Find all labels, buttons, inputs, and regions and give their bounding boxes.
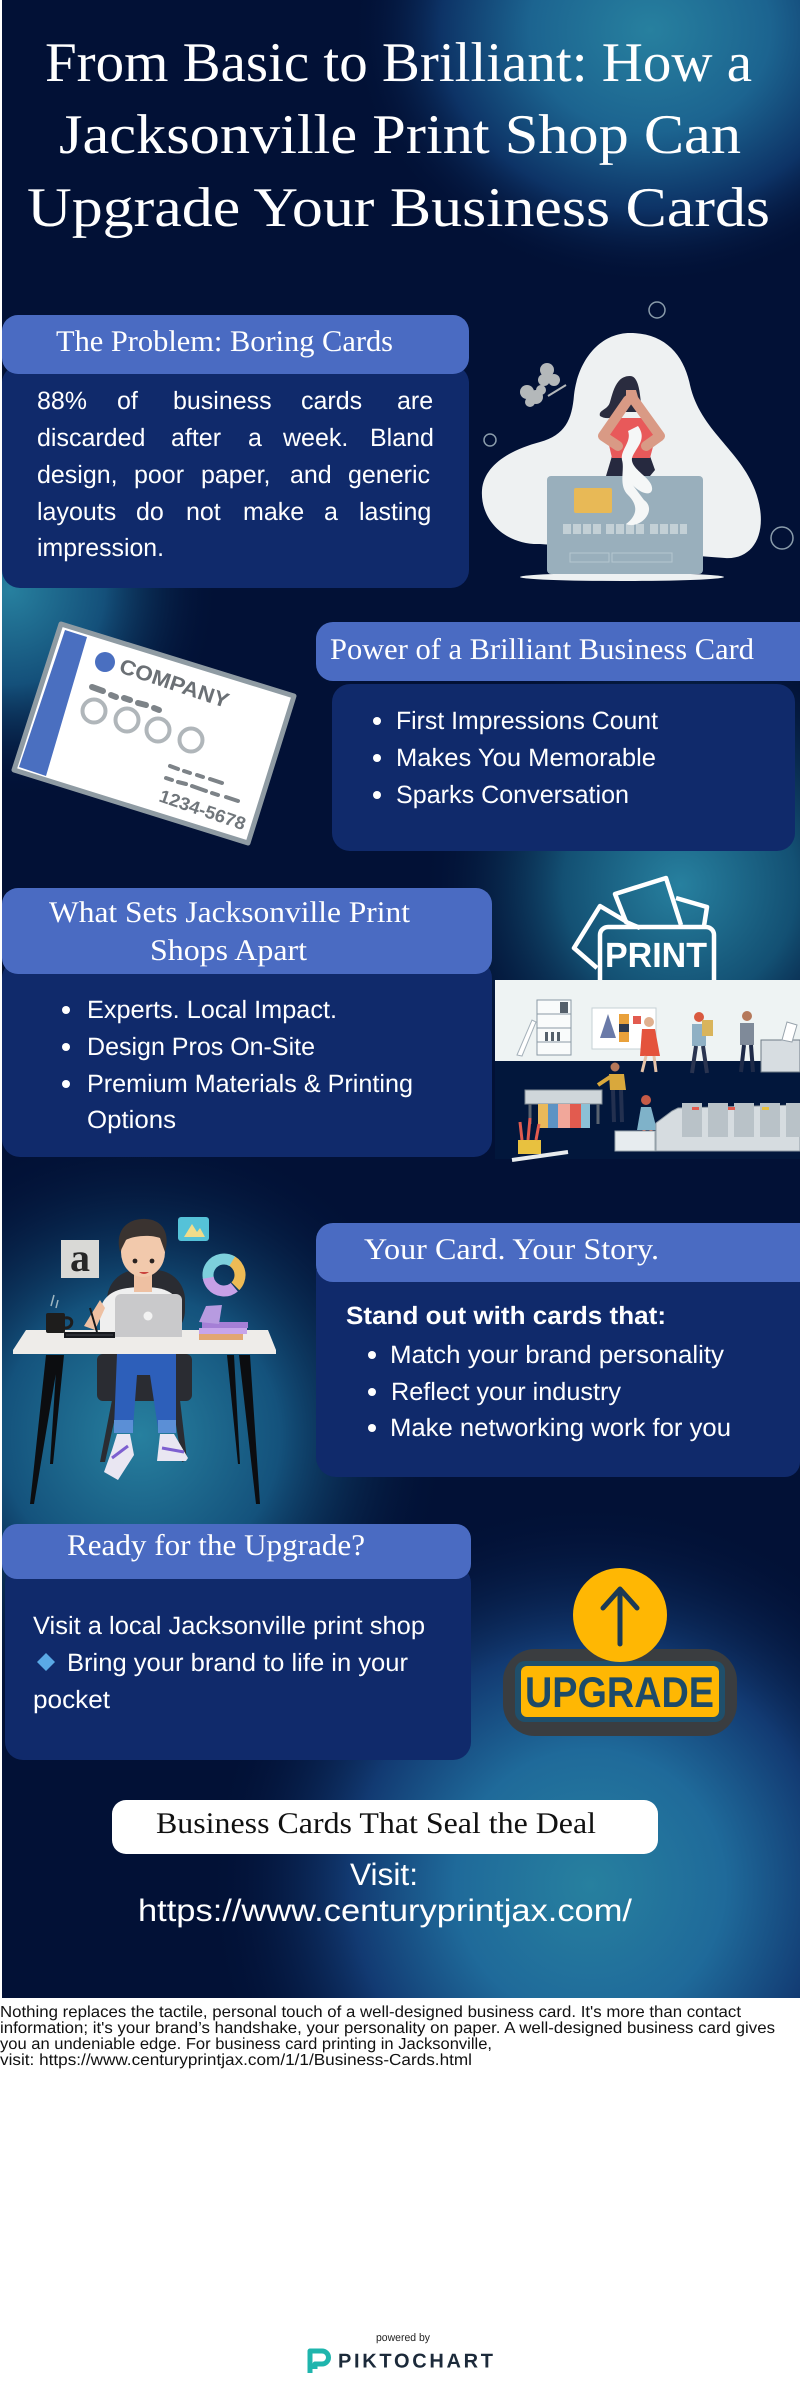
power heading <box>316 622 800 681</box>
apart heading: What Sets Jacksonville Print <box>49 896 411 929</box>
decorative circles <box>484 302 793 549</box>
piktochart logo <box>310 2351 328 2373</box>
upgrade text: Visit a local Jacksonville print shop <box>33 1612 425 1640</box>
wide printer <box>525 1090 602 1128</box>
desk <box>13 1330 276 1504</box>
color ring <box>201 1252 247 1298</box>
problem heading: The Problem: Boring Cards <box>56 325 393 358</box>
apart bullets: Premium Materials & Printing <box>87 1070 413 1098</box>
story body <box>316 1270 800 1477</box>
problem body <box>2 365 469 588</box>
credit card <box>547 476 703 574</box>
apart bullets: Options <box>87 1106 176 1134</box>
apart body <box>2 960 492 1157</box>
power bullets: Sparks Conversation <box>396 781 629 809</box>
rings <box>82 700 202 752</box>
powered by piktochart: powered by <box>376 2332 430 2344</box>
problem text: make <box>243 498 304 526</box>
panel: your card your story <box>316 1223 800 1477</box>
shop wall <box>495 980 800 1061</box>
person at copier <box>740 1011 800 1072</box>
upgrade text: Bring your brand to life in your <box>67 1649 408 1677</box>
description paragraph: Nothing replaces the tactile, personal touch of a well-designed business card. It's more than contact <box>0 2004 742 2021</box>
person with box <box>692 1012 713 1073</box>
problem text: of <box>117 387 138 415</box>
powered by piktochart <box>310 2332 493 2373</box>
illustration: designer at desk <box>13 1217 276 1504</box>
problem text: a <box>324 498 338 526</box>
title <box>27 32 770 239</box>
problem text: are <box>397 387 433 415</box>
apart heading <box>2 888 492 974</box>
story bullets <box>368 1341 731 1442</box>
power body <box>332 684 795 851</box>
callout: seal the deal: Business Cards That Seal the Deal <box>156 1807 596 1840</box>
problem text: lasting <box>359 498 431 526</box>
address dashes <box>166 766 238 801</box>
upgrade text <box>33 1612 425 1714</box>
panel: ready for the upgrade <box>2 1524 471 1760</box>
visit link: Visit: <box>350 1857 418 1892</box>
story heading: Your Card. Your Story. <box>364 1233 659 1266</box>
panel: the problem <box>2 315 469 588</box>
problem text: a <box>248 424 262 452</box>
problem text: layouts <box>37 498 116 526</box>
description paragraph: you an undeniable edge. For business card printing in Jacksonville, <box>0 2036 492 2053</box>
panel: power of a brilliant card <box>316 622 800 851</box>
problem text: Bland <box>370 424 434 452</box>
icon: print cards <box>574 878 714 980</box>
person in red <box>640 1017 660 1072</box>
illustration: woman with credit card <box>482 302 793 581</box>
problem heading <box>2 315 469 374</box>
badge pill <box>503 1649 737 1736</box>
power heading: Power of a Brilliant Business Card <box>330 633 754 666</box>
chair <box>97 1270 192 1462</box>
story bullets: Make networking work for you <box>390 1414 731 1442</box>
power bullets <box>373 707 658 809</box>
visit link <box>138 1857 632 1928</box>
problem text <box>37 387 434 562</box>
designer body <box>84 1272 188 1480</box>
problem text: not <box>186 498 221 526</box>
problem text: do <box>136 498 164 526</box>
illustration: print shop <box>495 980 800 1160</box>
apart bullets <box>62 996 413 1134</box>
badge label: UPGRADE <box>525 1669 714 1717</box>
paper bin <box>512 1118 568 1160</box>
letter tile <box>61 1235 99 1280</box>
upgrade body <box>5 1565 471 1760</box>
receipt <box>622 426 652 525</box>
problem text: cards <box>301 387 362 415</box>
problem text: discarded <box>37 424 145 452</box>
icon: upgrade badge <box>503 1568 737 1736</box>
title: From Basic to Brilliant: How a <box>45 32 752 94</box>
person in yellow <box>598 1062 626 1122</box>
problem text: generic <box>348 461 430 489</box>
illustration: company business card <box>14 624 294 843</box>
description paragraph: visit: https://www.centuryprintjax.com/1/1/Business-Cards.html <box>0 2052 472 2069</box>
problem text: after <box>171 424 221 452</box>
visit link: https://www.centuryprintjax.com/ <box>138 1893 632 1928</box>
designer head <box>119 1219 167 1277</box>
card shadow <box>520 573 724 581</box>
apart heading: Shops Apart <box>150 934 308 967</box>
title: Upgrade Your Business Cards <box>27 177 770 239</box>
powered by piktochart: PIKTOCHART <box>338 2350 493 2372</box>
badge circle <box>573 1568 667 1662</box>
phone number: 1234-5678 <box>157 786 248 834</box>
problem text: poor <box>134 461 184 489</box>
tablet and pen <box>65 1308 114 1337</box>
person in blue <box>637 1095 657 1148</box>
problem text: business <box>173 387 272 415</box>
panel: what sets shops apart <box>2 888 492 1157</box>
story lead: Stand out with cards that: <box>346 1302 666 1330</box>
offset press <box>615 1103 800 1151</box>
color poster <box>592 1008 656 1049</box>
power bullets: Makes You Memorable <box>396 744 656 772</box>
letter tile: a <box>70 1235 90 1280</box>
description paragraph: information; it's your brand’s handshake, your personality on paper. A well-designed business card gives <box>0 2020 775 2037</box>
power bullets: First Impressions Count <box>396 707 658 735</box>
story bullets: Match your brand personality <box>390 1341 725 1369</box>
logo dot <box>95 652 115 672</box>
mug <box>46 1295 72 1333</box>
upgrade heading <box>2 1524 471 1579</box>
story heading <box>316 1223 800 1282</box>
shop floor <box>495 1061 800 1159</box>
callout: seal the deal <box>112 1800 658 1854</box>
problem text: paper, <box>201 461 271 489</box>
blob <box>482 333 761 558</box>
books and phone <box>199 1305 248 1340</box>
woman <box>600 376 660 476</box>
title: Jacksonville Print Shop Can <box>59 104 741 166</box>
story bullets: Reflect your industry <box>391 1378 621 1406</box>
card body <box>14 624 294 843</box>
description paragraph <box>0 2004 775 2069</box>
problem text: impression. <box>37 534 164 562</box>
leaves <box>520 363 566 407</box>
problem text: week. <box>282 424 348 452</box>
icon: print cards: PRINT <box>605 936 707 975</box>
company name: COMPANY <box>116 655 232 713</box>
up arrow <box>603 1589 637 1644</box>
upgrade text: pocket <box>33 1686 110 1714</box>
diamond icon <box>37 1653 55 1671</box>
card stripe <box>19 630 87 776</box>
problem text: design, <box>37 461 118 489</box>
laptop <box>115 1294 182 1337</box>
name dashes <box>92 687 159 710</box>
shelf <box>517 1000 571 1056</box>
image tile <box>178 1217 209 1241</box>
upgrade heading: Ready for the Upgrade? <box>67 1529 365 1562</box>
apart bullets: Design Pros On-Site <box>87 1033 315 1061</box>
apart bullets: Experts. Local Impact. <box>87 996 337 1024</box>
problem text: 88% <box>37 387 87 415</box>
problem text: and <box>290 461 332 489</box>
